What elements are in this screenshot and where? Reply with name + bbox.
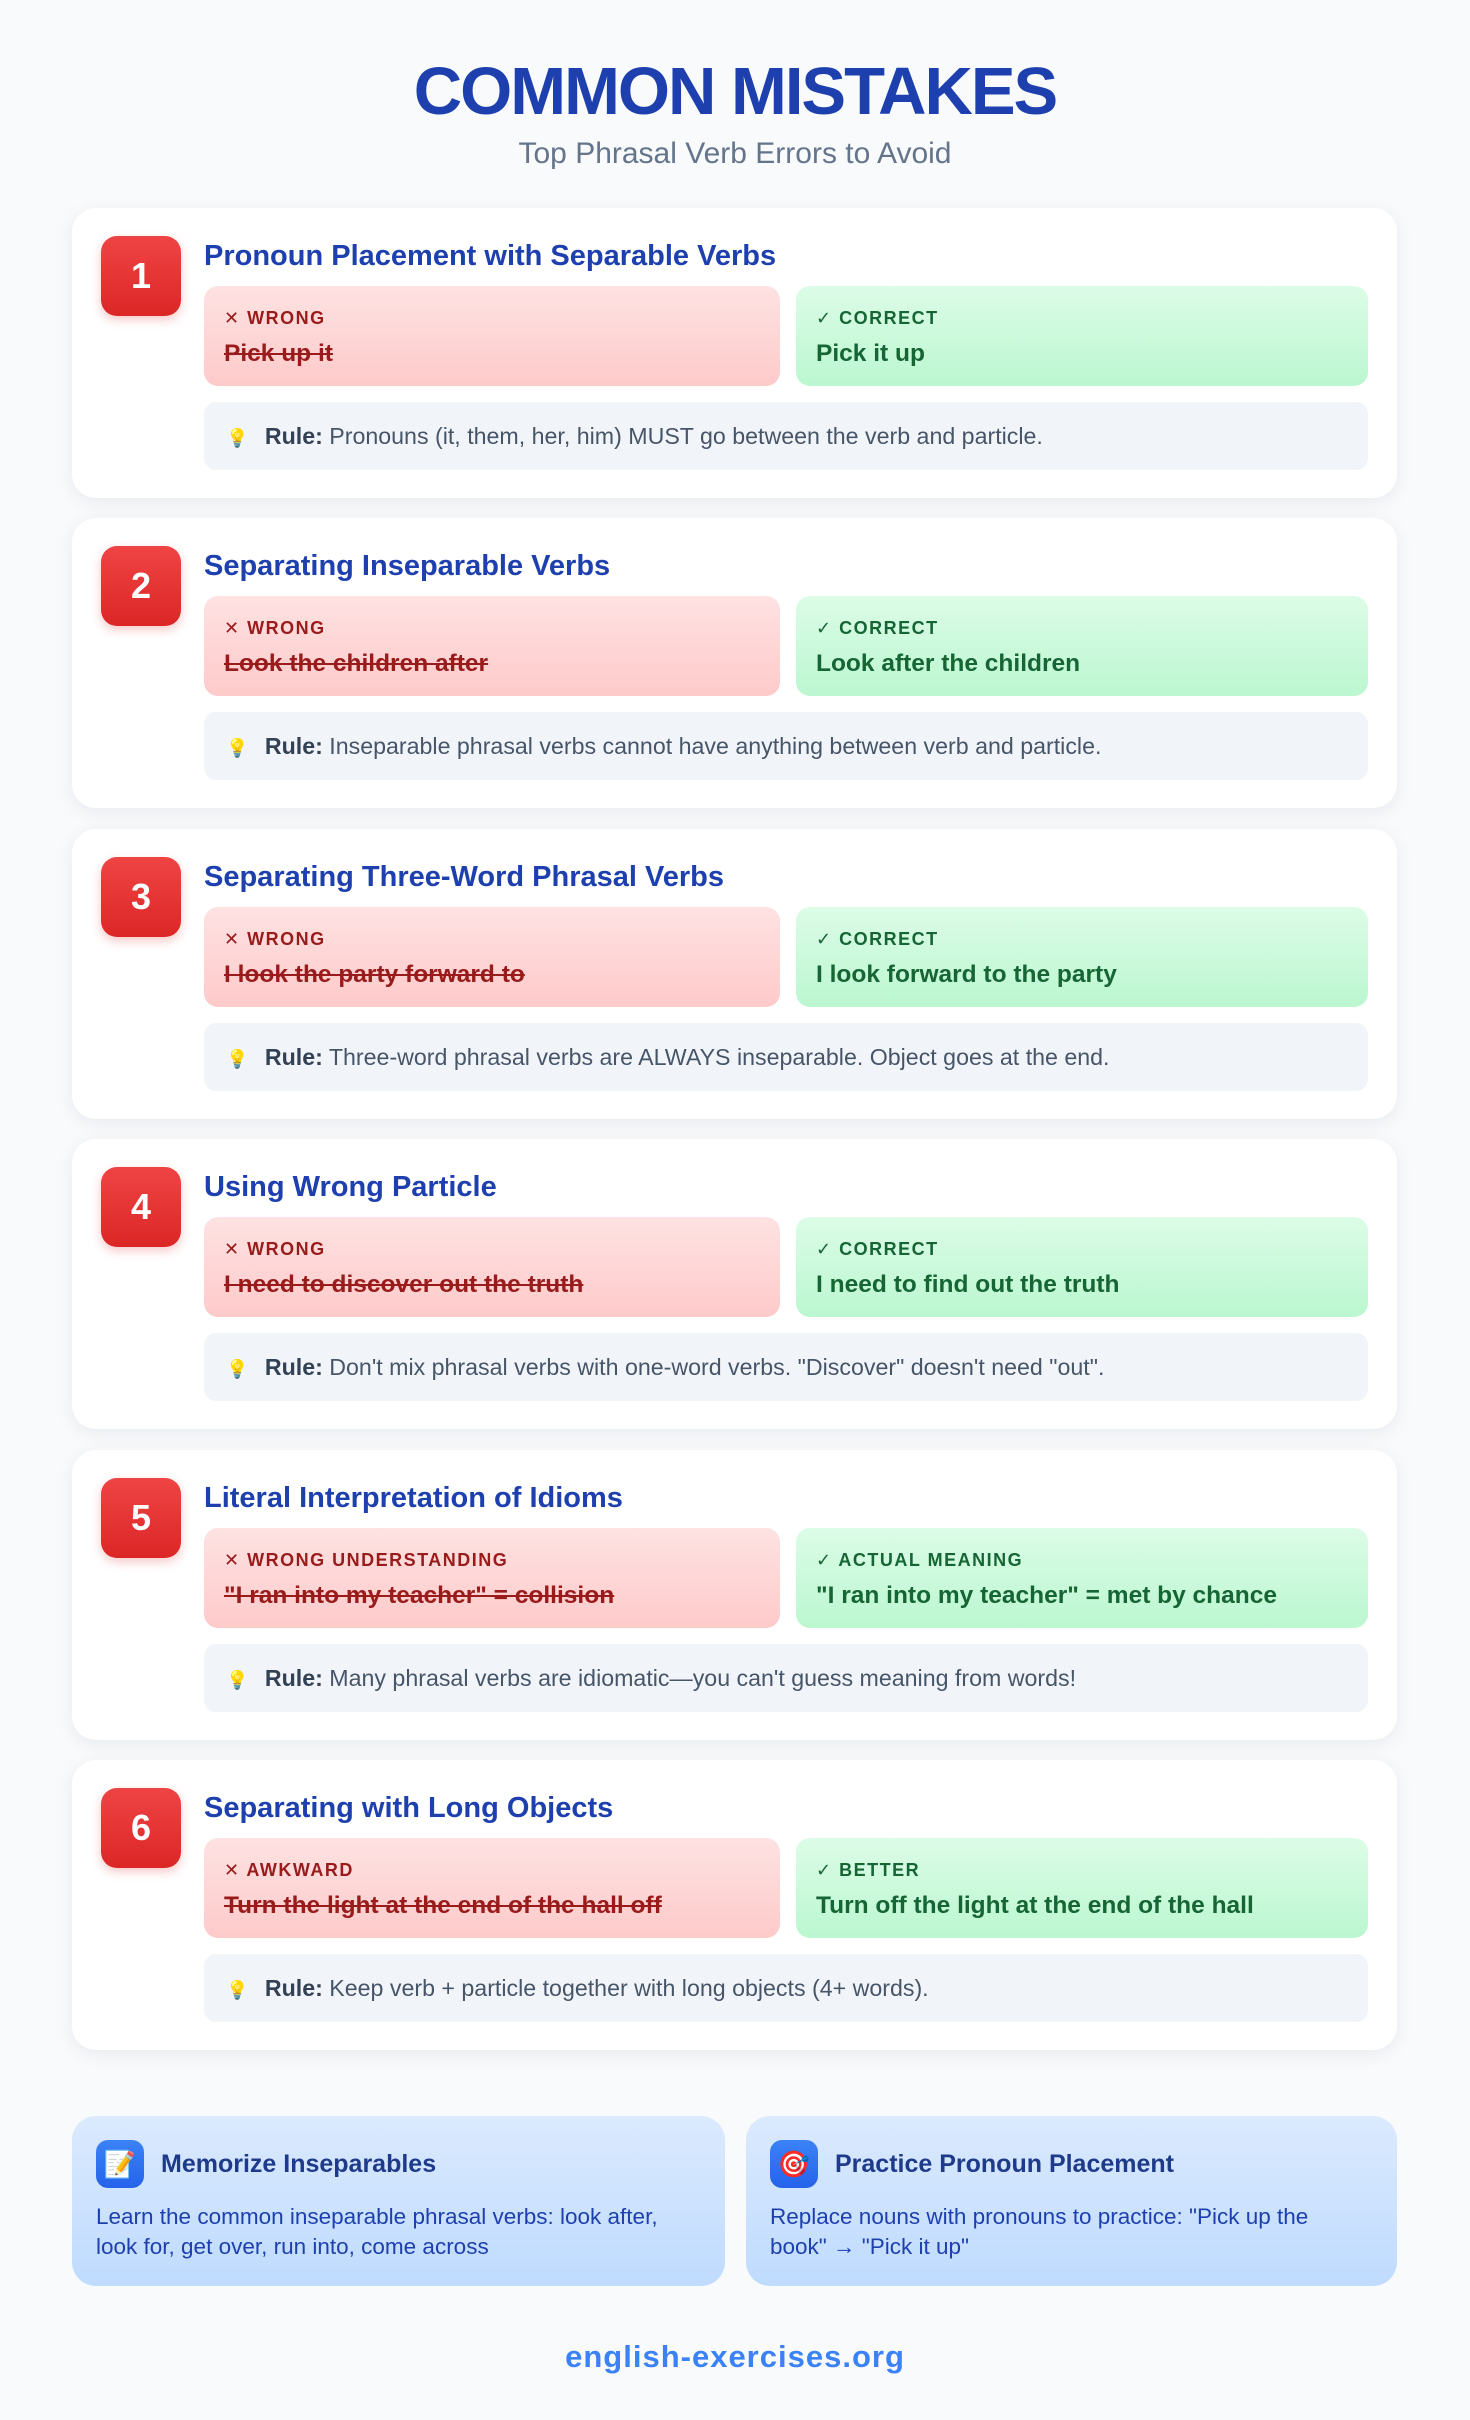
tip text 2 bbox=[770, 2204, 1308, 2259]
heading 6: Separating with Long Objects bbox=[204, 1792, 613, 1824]
correct box 4: I need to find out the truth bbox=[816, 1271, 1119, 1298]
wrong box 2: ✕ WRONG bbox=[224, 618, 326, 638]
correct box 6: ✓ BETTER bbox=[816, 1860, 920, 1880]
wrong box 3: ✕ WRONG bbox=[224, 929, 326, 949]
icon: memo bbox=[96, 2140, 144, 2188]
wrong box 4: I need to discover out the truth bbox=[224, 1271, 583, 1298]
rule 2 bbox=[204, 712, 1368, 780]
icon: target: 🎯 bbox=[778, 2149, 810, 2179]
tip text 1 bbox=[96, 2204, 658, 2259]
badge 2: 2 bbox=[131, 565, 151, 606]
badge 3 bbox=[101, 857, 181, 937]
wrong box 2 bbox=[204, 596, 780, 696]
badge 1: 1 bbox=[131, 255, 151, 296]
rule 4 bbox=[204, 1333, 1368, 1401]
heading 2: Separating Inseparable Verbs bbox=[204, 550, 610, 582]
tip text 2: Replace nouns with pronouns to practice: "Pick up the bbox=[770, 2204, 1308, 2229]
wrong box 5: ✕ WRONG UNDERSTANDING bbox=[224, 1550, 508, 1570]
tip heading 1: Memorize Inseparables bbox=[161, 2150, 436, 2178]
tip heading 2: Practice Pronoun Placement bbox=[835, 2150, 1174, 2178]
badge 5 bbox=[101, 1478, 181, 1558]
wrong box 1 bbox=[204, 286, 780, 386]
icon: memo: 📝 bbox=[104, 2149, 136, 2179]
wrong box 5 bbox=[204, 1528, 780, 1628]
wrong box 1: ✕ WRONG bbox=[224, 308, 326, 328]
correct box 3 bbox=[796, 907, 1368, 1007]
panel: mistake 6 bbox=[72, 1760, 1397, 2050]
rule 1 bbox=[204, 402, 1368, 470]
icon: target bbox=[770, 2140, 818, 2188]
badge 3: 3 bbox=[131, 876, 151, 917]
wrong box 5: "I ran into my teacher" = collision bbox=[224, 1582, 614, 1609]
correct box 4 bbox=[796, 1217, 1368, 1317]
tip text 1: look for, get over, run into, come across bbox=[96, 2234, 489, 2259]
wrong box 6 bbox=[204, 1838, 780, 1938]
rule 6 bbox=[204, 1954, 1368, 2022]
correct box 5: "I ran into my teacher" = met by chance bbox=[816, 1582, 1277, 1609]
badge 6: 6 bbox=[131, 1807, 151, 1848]
wrong box 1: Pick up it bbox=[224, 340, 333, 367]
heading 3: Separating Three-Word Phrasal Verbs bbox=[204, 861, 724, 893]
rule 5 bbox=[204, 1644, 1368, 1712]
footer: english-exercises.org bbox=[565, 2339, 905, 2374]
correct box 6: Turn off the light at the end of the hall bbox=[816, 1892, 1254, 1919]
rule 3: 💡 Rule: Three-word phrasal verbs are ALWAYS inseparable. Object goes at the end. bbox=[226, 1044, 1110, 1070]
badge 5: 5 bbox=[131, 1497, 151, 1538]
correct box 5 bbox=[796, 1528, 1368, 1628]
wrong box 4: ✕ WRONG bbox=[224, 1239, 326, 1259]
wrong box 4 bbox=[204, 1217, 780, 1317]
badge 4: 4 bbox=[131, 1186, 151, 1227]
panel: mistake 1 bbox=[72, 208, 1397, 498]
panel: mistake 2 bbox=[72, 518, 1397, 808]
correct box 6 bbox=[796, 1838, 1368, 1938]
wrong box 3 bbox=[204, 907, 780, 1007]
panel: mistake 3 bbox=[72, 829, 1397, 1119]
badge 6 bbox=[101, 1788, 181, 1868]
heading 4: Using Wrong Particle bbox=[204, 1171, 497, 1203]
correct box 1 bbox=[796, 286, 1368, 386]
tip: practice pronoun placement bbox=[746, 2116, 1397, 2286]
rule 3 bbox=[204, 1023, 1368, 1091]
wrong box 6: Turn the light at the end of the hall off bbox=[224, 1892, 662, 1919]
rule 5: 💡 Rule: Many phrasal verbs are idiomatic—you can't guess meaning from words! bbox=[226, 1665, 1076, 1691]
tip: memorize inseparables bbox=[72, 2116, 725, 2286]
panel: mistake 4 bbox=[72, 1139, 1397, 1429]
heading 5: Literal Interpretation of Idioms bbox=[204, 1482, 623, 1514]
correct box 2: ✓ CORRECT bbox=[816, 618, 939, 638]
wrong box 2: Look the children after bbox=[224, 650, 488, 677]
tip text 1: Learn the common inseparable phrasal verbs: look after, bbox=[96, 2204, 658, 2229]
rule 2: 💡 Rule: Inseparable phrasal verbs cannot have anything between verb and particle. bbox=[226, 733, 1101, 759]
title: COMMON MISTAKES bbox=[414, 54, 1056, 129]
heading 1: Pronoun Placement with Separable Verbs bbox=[204, 240, 776, 272]
correct box 3: I look forward to the party bbox=[816, 961, 1117, 988]
rule 6: 💡 Rule: Keep verb + particle together with long objects (4+ words). bbox=[226, 1975, 929, 2001]
badge 1 bbox=[101, 236, 181, 316]
badge 4 bbox=[101, 1167, 181, 1247]
rule 1: 💡 Rule: Pronouns (it, them, her, him) MUST go between the verb and particle. bbox=[226, 423, 1043, 449]
wrong box 6: ✕ AWKWARD bbox=[224, 1860, 354, 1880]
correct box 2 bbox=[796, 596, 1368, 696]
panel: mistake 5 bbox=[72, 1450, 1397, 1740]
tip text 2: book" → "Pick it up" bbox=[770, 2234, 969, 2259]
correct box 5: ✓ ACTUAL MEANING bbox=[816, 1550, 1023, 1570]
badge 2 bbox=[101, 546, 181, 626]
correct box 1: Pick it up bbox=[816, 340, 925, 367]
correct box 3: ✓ CORRECT bbox=[816, 929, 939, 949]
correct box 2: Look after the children bbox=[816, 650, 1080, 677]
subtitle: Top Phrasal Verb Errors to Avoid bbox=[518, 137, 952, 170]
wrong box 3: I look the party forward to bbox=[224, 961, 525, 988]
correct box 1: ✓ CORRECT bbox=[816, 308, 939, 328]
correct box 4: ✓ CORRECT bbox=[816, 1239, 939, 1259]
rule 4: 💡 Rule: Don't mix phrasal verbs with one-word verbs. "Discover" doesn't need "out". bbox=[226, 1354, 1104, 1380]
